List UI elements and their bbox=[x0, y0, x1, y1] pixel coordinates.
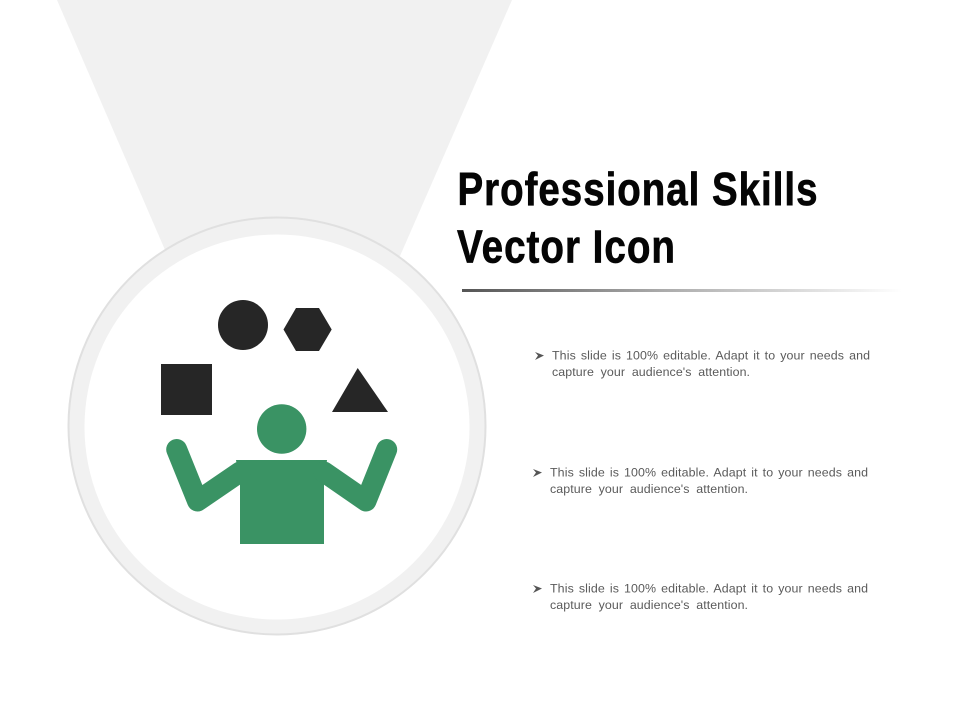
icon: square bbox=[161, 364, 212, 415]
icon: circle bbox=[218, 300, 268, 350]
icon: person juggling shapes bbox=[161, 300, 388, 544]
bullet text 2: capture your audience's attention. bbox=[550, 482, 748, 496]
title bbox=[457, 163, 818, 272]
bullet text 1: This slide is 100% editable. Adapt it to your needs and bbox=[552, 348, 870, 362]
medallion ring bbox=[68, 218, 486, 634]
title underline bbox=[462, 289, 902, 292]
spotlight beam bbox=[57, 0, 512, 256]
title: Professional Skills bbox=[458, 163, 818, 215]
bullet text 2: This slide is 100% editable. Adapt it to your needs and bbox=[550, 466, 868, 480]
bullet text 1: capture your audience's attention. bbox=[552, 365, 750, 379]
icon: hexagon bbox=[284, 308, 332, 351]
bullet text 3: This slide is 100% editable. Adapt it to your needs and bbox=[550, 582, 868, 596]
bullet text 1 bbox=[535, 348, 870, 379]
bullet text 3: capture your audience's attention. bbox=[550, 598, 748, 612]
icon: person bbox=[177, 404, 387, 544]
bullet text 3 bbox=[533, 582, 868, 612]
title: Vector Icon bbox=[457, 220, 676, 272]
bullet text 2 bbox=[533, 466, 868, 496]
icon: triangle bbox=[332, 368, 388, 412]
